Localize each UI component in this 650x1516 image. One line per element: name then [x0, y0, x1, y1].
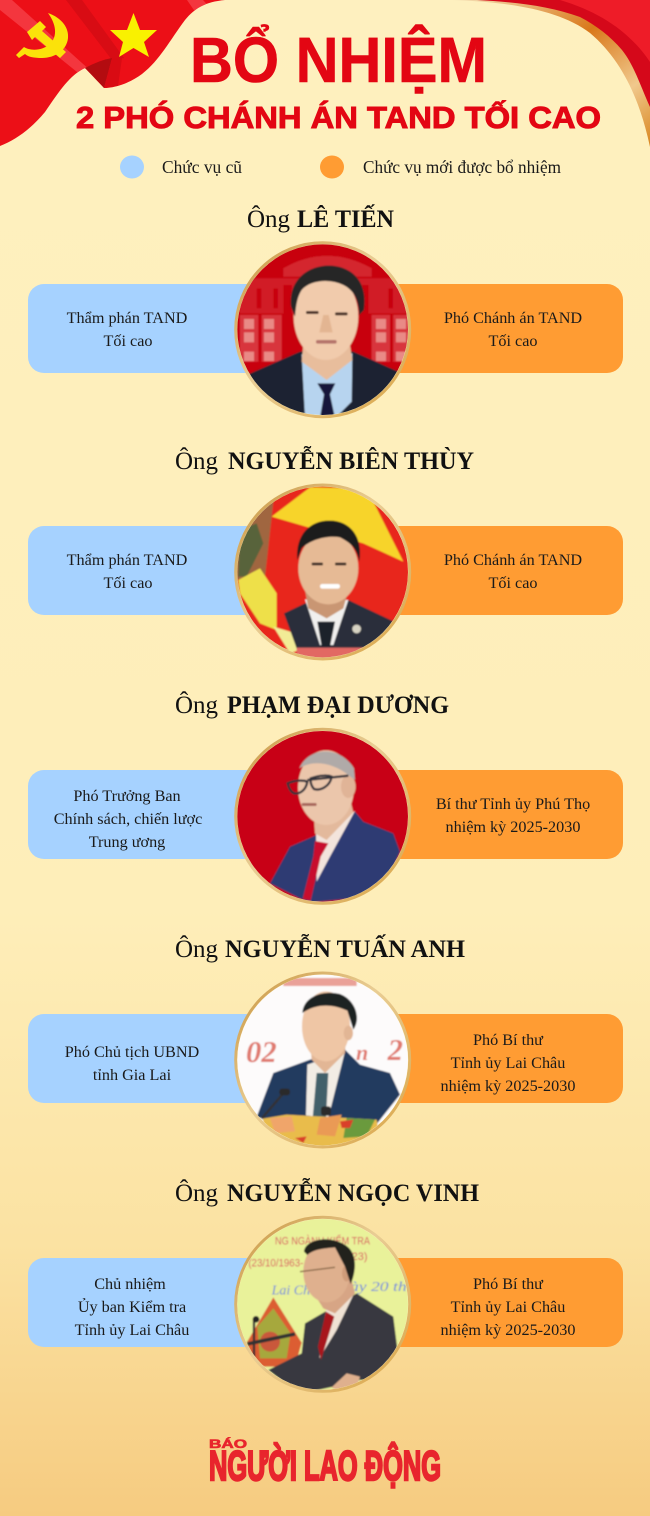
new position bar: Tối cao	[488, 332, 538, 350]
name: Nguyễn Tuấn Anh: NGUYỄN TUẤN ANH	[225, 934, 466, 963]
name: Nguyễn Ngọc Vinh: NGUYỄN NGỌC VINH	[227, 1178, 480, 1207]
portrait: Nguyễn Tuấn Anh: 02	[246, 1035, 277, 1069]
portrait: Nguyễn Tuấn Anh: 2	[387, 1033, 403, 1067]
new position bar: Phó Chánh án TAND	[444, 309, 582, 327]
old position bar: Phó Chủ tịch UBND	[65, 1043, 200, 1061]
old position bar	[28, 1258, 268, 1347]
top right flag corner	[452, 0, 650, 147]
name: Lê Tiến: Ông	[247, 205, 291, 233]
old position bar: Trung ương	[89, 833, 165, 851]
name: Nguyễn Ngọc Vinh: Ông	[175, 1179, 219, 1207]
portrait: Nguyễn Tuấn Anh: n	[356, 1040, 368, 1065]
new position bar: Tối cao	[488, 574, 538, 592]
name: Nguyễn Tuấn Anh: Ông	[175, 935, 219, 963]
logo: Báo Người Lao Động: NGƯỜI LAO ĐỘNG	[209, 1441, 441, 1489]
old position bar	[28, 526, 268, 615]
portrait: Nguyễn Ngọc Vinh: NG NGÀNH KIỂM TRA	[275, 1234, 371, 1247]
legend	[120, 156, 561, 178]
title: 2 PHÓ CHÁNH ÁN TAND TỐI CAO	[76, 99, 601, 135]
new position bar: nhiệm kỳ 2025-2030	[446, 818, 580, 836]
name: Phạm Đại Dương: PHẠM ĐẠI DƯƠNG	[227, 692, 449, 719]
new position bar: Phó Chánh án TAND	[444, 551, 582, 569]
legend: Chức vụ mới được bổ nhiệm	[363, 157, 561, 177]
portrait: Nguyễn Ngọc Vinh: (23/10/1963-	[248, 1258, 304, 1270]
name: Nguyễn Biên Thùy: Ông	[175, 447, 219, 475]
old position bar: Ủy ban Kiểm tra	[78, 1297, 186, 1316]
new position bar: Tỉnh ủy Lai Châu	[451, 1298, 565, 1316]
portrait: Lê Tiến	[233, 242, 413, 425]
person 3	[28, 691, 623, 908]
new position bar	[380, 1014, 623, 1103]
portrait: Nguyễn Ngọc Vinh: 23)	[352, 1251, 368, 1263]
old position bar: Phó Trưởng Ban	[73, 787, 181, 805]
portrait: Nguyễn Ngọc Vinh: Lai Ch	[271, 1283, 310, 1298]
person 2	[28, 446, 623, 663]
old position bar: Tối cao	[104, 332, 152, 350]
portrait: Phạm Đại Dương	[233, 728, 413, 908]
old position bar: Tỉnh ủy Lai Châu	[75, 1321, 189, 1339]
new position bar: Tỉnh ủy Lai Châu	[451, 1054, 565, 1072]
old position bar: Chủ nhiệm	[94, 1275, 166, 1293]
old position bar: tỉnh Gia Lai	[93, 1066, 172, 1084]
portrait: Nguyễn Ngọc Vinh: ày 20 th	[350, 1280, 407, 1295]
icon: hammer and sickle	[16, 13, 68, 58]
portrait: Nguyễn Ngọc Vinh	[233, 1217, 413, 1397]
red flag with hammer, sickle and star	[0, 0, 225, 146]
portrait: Nguyễn Tuấn Anh	[233, 971, 413, 1155]
new position bar	[380, 770, 623, 859]
new position bar	[380, 526, 623, 615]
old position bar: Tối cao	[104, 574, 152, 592]
new position bar: nhiệm kỳ 2025-2030	[441, 1321, 575, 1339]
name: Phạm Đại Dương: Ông	[175, 691, 219, 719]
person 5	[28, 1178, 623, 1397]
new position bar: Bí thư Tỉnh ủy Phú Thọ	[436, 795, 590, 813]
legend: Chức vụ cũ	[162, 157, 242, 177]
old position bar: Thẩm phán TAND	[67, 551, 188, 569]
old position bar	[28, 770, 268, 859]
new position bar: Phó Bí thư	[473, 1275, 544, 1293]
title	[76, 23, 601, 135]
icon: yellow star	[110, 13, 157, 57]
new position bar	[380, 284, 623, 373]
portrait: Nguyễn Biên Thùy	[233, 483, 413, 663]
new position bar: Phó Bí thư	[473, 1031, 544, 1049]
person 1	[28, 204, 623, 425]
person 4	[28, 934, 623, 1155]
new position bar	[380, 1258, 623, 1347]
logo: Báo Người Lao Động: BÁO	[209, 1436, 247, 1451]
name: Nguyễn Biên Thùy: NGUYỄN BIÊN THÙY	[228, 446, 474, 475]
old position bar: Thẩm phán TAND	[67, 309, 188, 327]
logo: Báo Người Lao Động	[209, 1436, 441, 1489]
old position bar	[28, 284, 268, 373]
old position bar	[28, 1014, 268, 1103]
name: Lê Tiến: LÊ TIẾN	[297, 204, 394, 233]
title: BỔ NHIỆM	[190, 23, 487, 96]
name: Lê Tiến	[247, 204, 394, 233]
old position bar: Chính sách, chiến lược	[54, 810, 202, 828]
new position bar: nhiệm kỳ 2025-2030	[441, 1077, 575, 1095]
